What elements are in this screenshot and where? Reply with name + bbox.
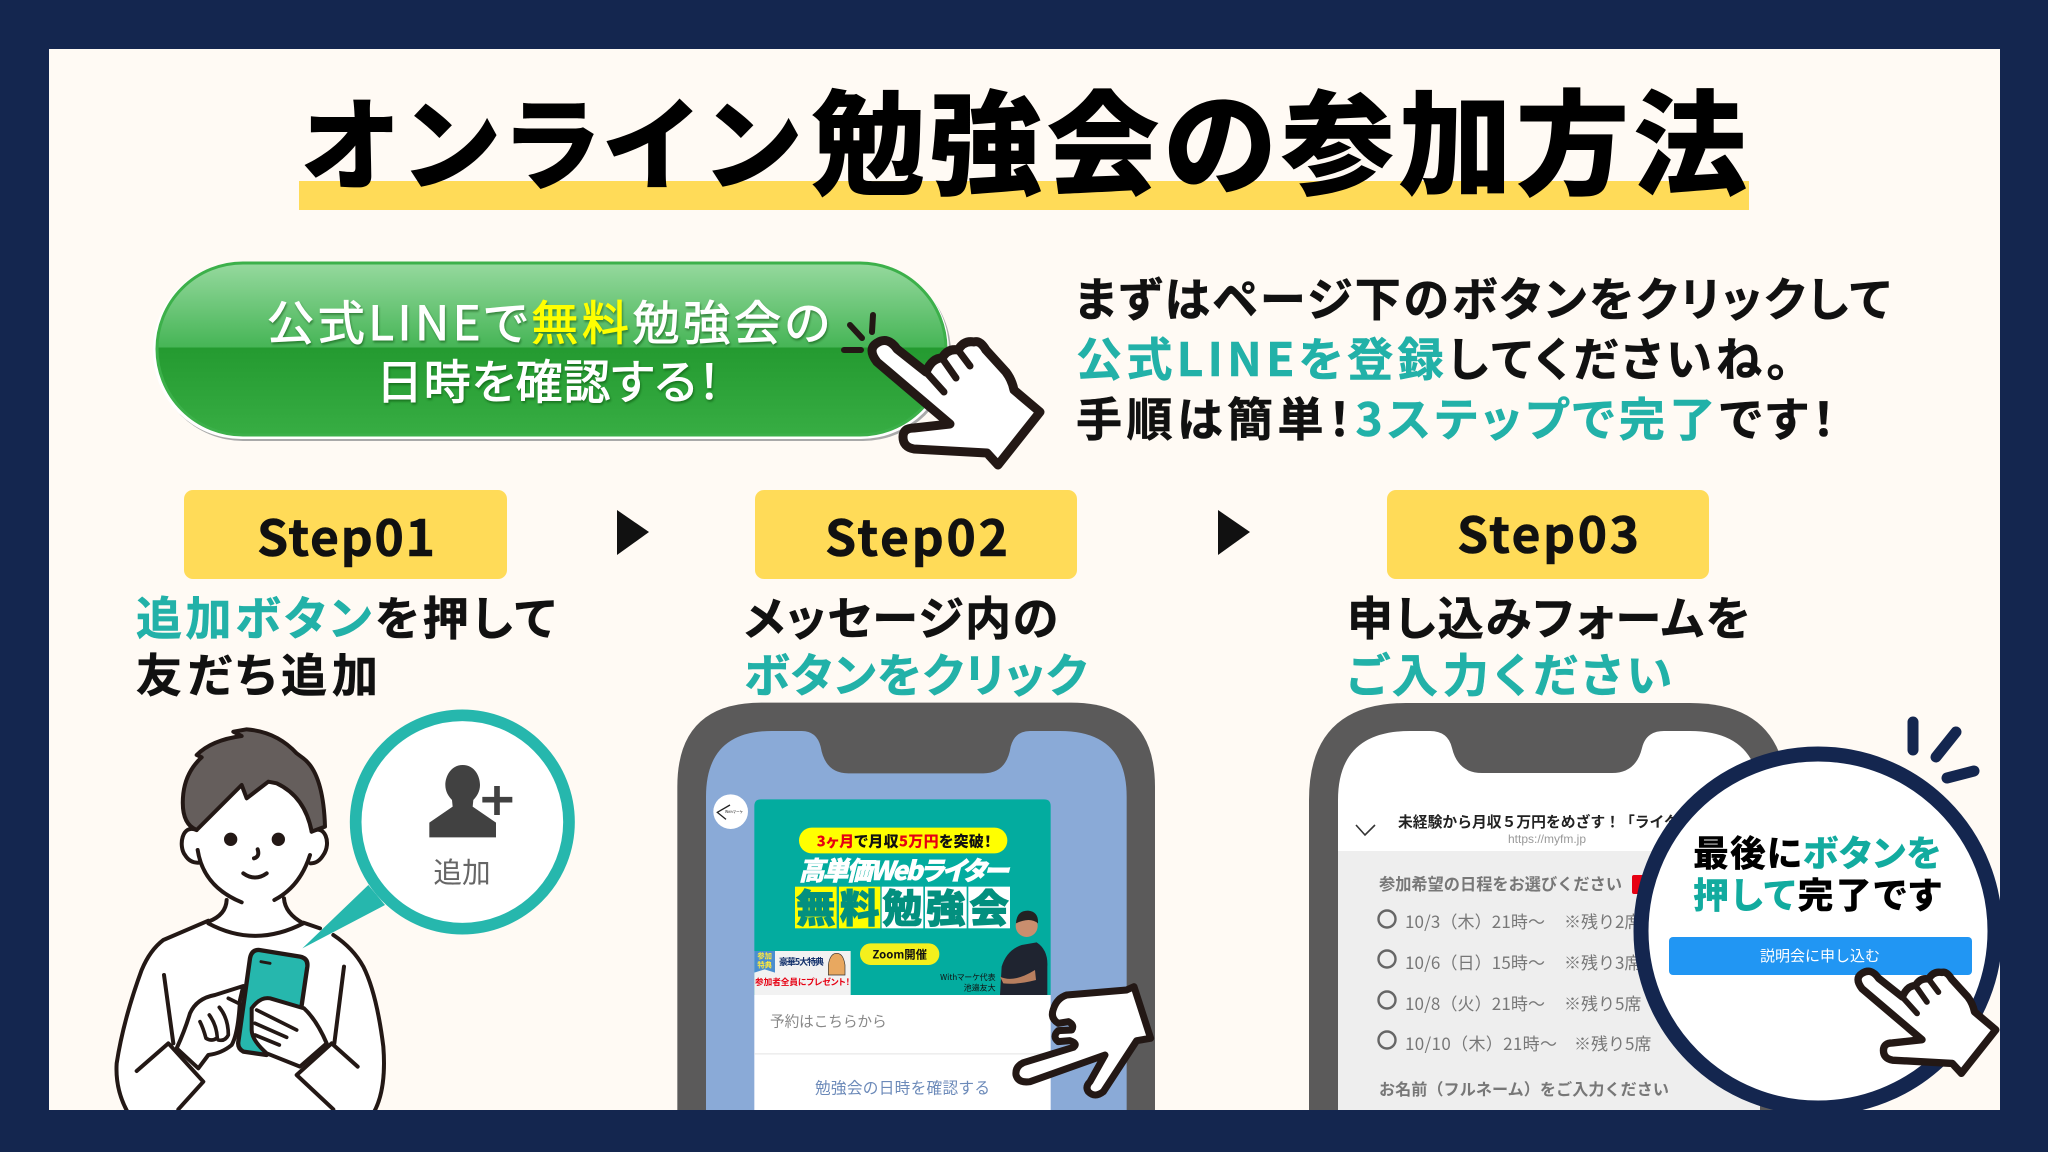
callout circle: final button: 押して完了です [1693, 867, 1941, 919]
step 02 description: ボタンをクリック [744, 640, 1087, 706]
banner card: Withマーケ代表 [940, 972, 996, 983]
banner card: 無 [796, 877, 835, 934]
body [116, 898, 384, 1113]
banner card: 特典 [757, 959, 773, 970]
phone mockup: step 03 form [1309, 703, 1787, 1121]
callout circle: final button [1641, 722, 1995, 1108]
banner card: 3ヶ月で月収5万円を突破！ [817, 831, 992, 852]
date options [1378, 871, 1669, 1100]
date options: ※残り5席 [1564, 990, 1641, 1015]
date options: 10/8（火）21時〜 [1405, 990, 1545, 1015]
step 02 badge [755, 490, 1077, 579]
phone frame [1309, 703, 1787, 1120]
step 03 description: 申し込みフォームを [1347, 583, 1750, 649]
banner card: 料 [840, 877, 879, 934]
speech bubble: add friend [302, 715, 569, 948]
banner card: Zoom開催 [872, 947, 927, 963]
step 02 description: メッセージ内の [744, 583, 1058, 649]
illustration: person holding smartphone [116, 729, 384, 1113]
form body [1338, 851, 1760, 1121]
title: オンライン [300, 66, 803, 212]
avatar [713, 794, 748, 829]
arrow: step 1 to 2 [617, 510, 649, 555]
reply panel: 勉強会の日時を確認する [815, 1075, 990, 1098]
phone [238, 950, 307, 1055]
green LINE button: 日時を確認する！ [376, 344, 721, 413]
form header [1356, 811, 1723, 846]
banner card: 池邉友大 [964, 982, 996, 993]
reply panel [754, 995, 1051, 1113]
date options: 10/10（木）21時〜 [1405, 1030, 1557, 1055]
intro text: 公式LINEを登録してくださいね。 [1076, 324, 1789, 390]
step 01 description: 友だち追加 [136, 640, 378, 706]
callout circle: final button: 説明会に申し込む [1760, 945, 1880, 966]
title [299, 54, 1749, 219]
step 03 description [1347, 583, 1750, 706]
green LINE button: 公式LINEで無料勉強会の [267, 285, 830, 354]
step 01 badge: Step01 [257, 499, 435, 571]
banner card [754, 799, 1051, 995]
form header: https://myfm.jp [1508, 832, 1586, 846]
form header: 未経験から月収５万円をめざす！「ライターにな [1398, 811, 1723, 832]
banner card: 高単価Webライター [799, 851, 1010, 888]
face [181, 783, 327, 903]
date options: ※残り3席 [1564, 949, 1641, 974]
date options: 10/3（木）21時〜 [1405, 908, 1545, 933]
intro text: まずはページ下のボタンをクリックして [1075, 264, 1890, 330]
icon: add friend [429, 765, 496, 837]
phone frame [677, 703, 1155, 1113]
avatar: Withマーケ [725, 809, 744, 815]
banner card: 強 [926, 877, 965, 934]
arrow: step 2 to 3 [1218, 510, 1250, 555]
callout circle: final button: 最後にボタンを [1693, 825, 1941, 877]
step 01 description: 追加ボタンを押して [136, 583, 555, 649]
icon: hand cursor on submit button [1858, 971, 1996, 1073]
screen [1338, 731, 1760, 1120]
photo of presenter [1000, 942, 1047, 995]
step 03 badge [1387, 490, 1709, 579]
date options: ※残り2席 [1564, 908, 1641, 933]
facial features [224, 833, 237, 846]
left hand [177, 986, 243, 1068]
step 03 description: ご入力ください [1347, 640, 1672, 706]
sleeves [137, 967, 358, 1109]
intro text: 手順は簡単！3ステップで完了です！ [1076, 384, 1835, 450]
screen [706, 731, 1127, 1113]
intro text [1075, 264, 1890, 450]
banner card: 参加者全員にプレゼント！ [755, 976, 850, 988]
icon: hand cursor on button [844, 315, 1040, 465]
title: 勉強会の参加方法 [811, 54, 1747, 219]
step 03 badge: Step03 [1457, 496, 1639, 568]
green LINE button [153, 262, 951, 441]
step 02 badge: Step02 [825, 499, 1008, 571]
step 02 description [744, 583, 1087, 706]
date options: 10/6（日）15時〜 [1405, 949, 1545, 974]
banner card: 豪華5大特典 [779, 955, 824, 968]
reply panel: 予約はこちらから [770, 1010, 887, 1031]
speech bubble: add friend: 追加 [433, 851, 491, 892]
date options: ※残り5席 [1574, 1030, 1651, 1055]
phone mockup: step 02 message [677, 703, 1155, 1113]
banner card: 勉 [883, 877, 922, 934]
banner card: 会 [969, 877, 1009, 934]
banner card: 参加 [757, 951, 772, 962]
icon: hand cursor [1016, 987, 1151, 1095]
right hand [252, 998, 327, 1067]
hair [183, 729, 325, 832]
date options: お名前（フルネーム）をご入力ください [1379, 1076, 1669, 1100]
step 01 badge [184, 490, 507, 579]
date options: 参加希望の日程をお選びください [1379, 871, 1622, 895]
step 01 description [136, 583, 555, 706]
